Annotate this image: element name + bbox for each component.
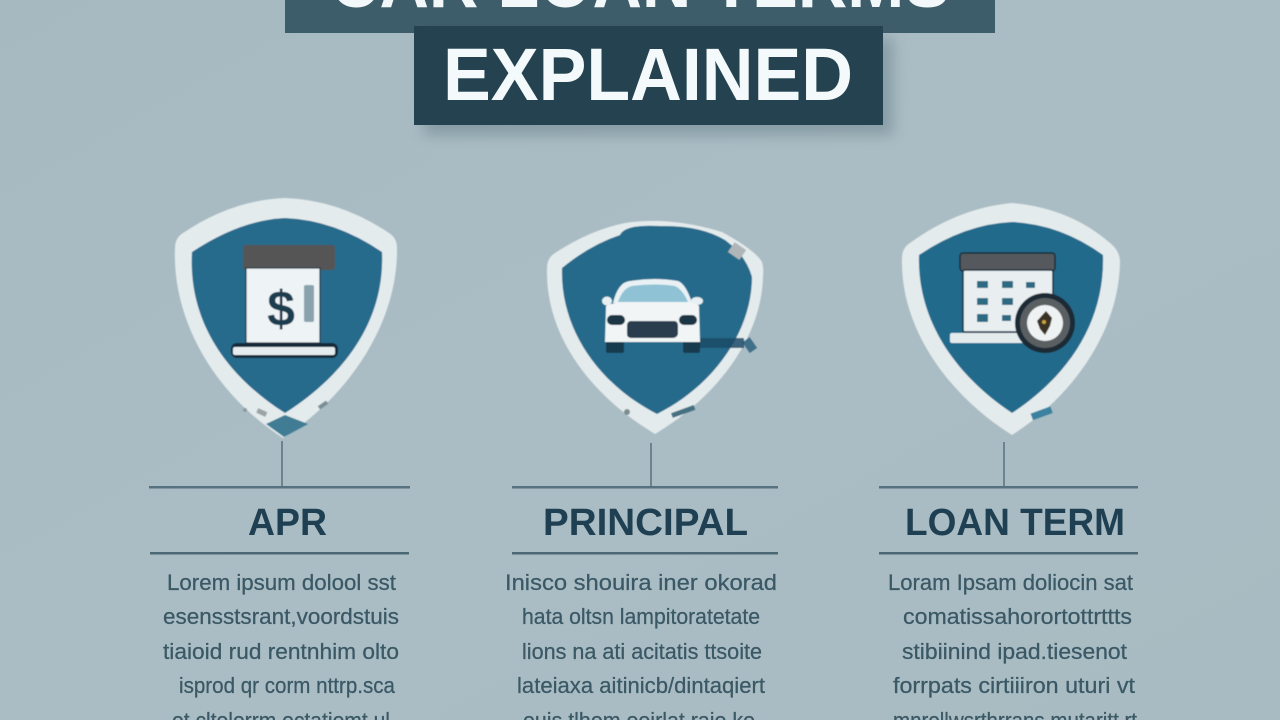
body text: APR: isprod qr corm nttrp.sca [179, 673, 396, 698]
title banner [285, 0, 995, 135]
body text: Loan Term: comatissahorortottrttts [903, 604, 1132, 629]
title top bar [285, 0, 995, 33]
body text: APR [163, 570, 399, 720]
body text: Loan Term: stibiinind ipad.tiesenot [902, 639, 1127, 664]
column: Principal [505, 221, 778, 720]
connector [281, 441, 283, 486]
body text: APR: esensstsrant,voordstuis [163, 604, 399, 629]
shield icon: APR document with dollar sign: $ [267, 281, 295, 337]
shield icon: APR document with dollar sign [175, 198, 397, 438]
body text: Loan Term: Loram Ipsam doliocin sat [888, 570, 1133, 595]
body text: Loan Term: forrpats cirtiiiron uturi vt [893, 673, 1135, 698]
shield icon: Loan Term calendar and clock [902, 203, 1120, 435]
heading: APR: APR [248, 502, 327, 544]
body text: Principal [505, 570, 777, 720]
connector [1003, 442, 1005, 486]
body text: APR: tiaioid rud rentnhim olto [163, 639, 399, 664]
column: APR [149, 198, 410, 720]
body text: Principal: Inisco shouira iner okorad [505, 570, 777, 595]
heading: Loan Term: LOAN TERM [905, 502, 1125, 544]
body text: Principal: lions na ati acitatis ttsoite [522, 639, 762, 664]
shield icon: Principal car [547, 221, 763, 434]
heading: Principal: PRINCIPAL [543, 502, 748, 544]
title lower box: EXPLAINED [443, 33, 853, 116]
column: Loan Term [879, 203, 1138, 720]
body text: Principal: lateiaxa aitinicb/dintaqiert [517, 673, 765, 698]
body text: Loan Term [888, 570, 1137, 720]
connector [650, 443, 652, 486]
title lower box [414, 26, 893, 135]
body text: Principal: hata oltsn lampitoratetate [522, 604, 760, 629]
body text: APR: Lorem ipsum dolool sst [167, 570, 396, 595]
